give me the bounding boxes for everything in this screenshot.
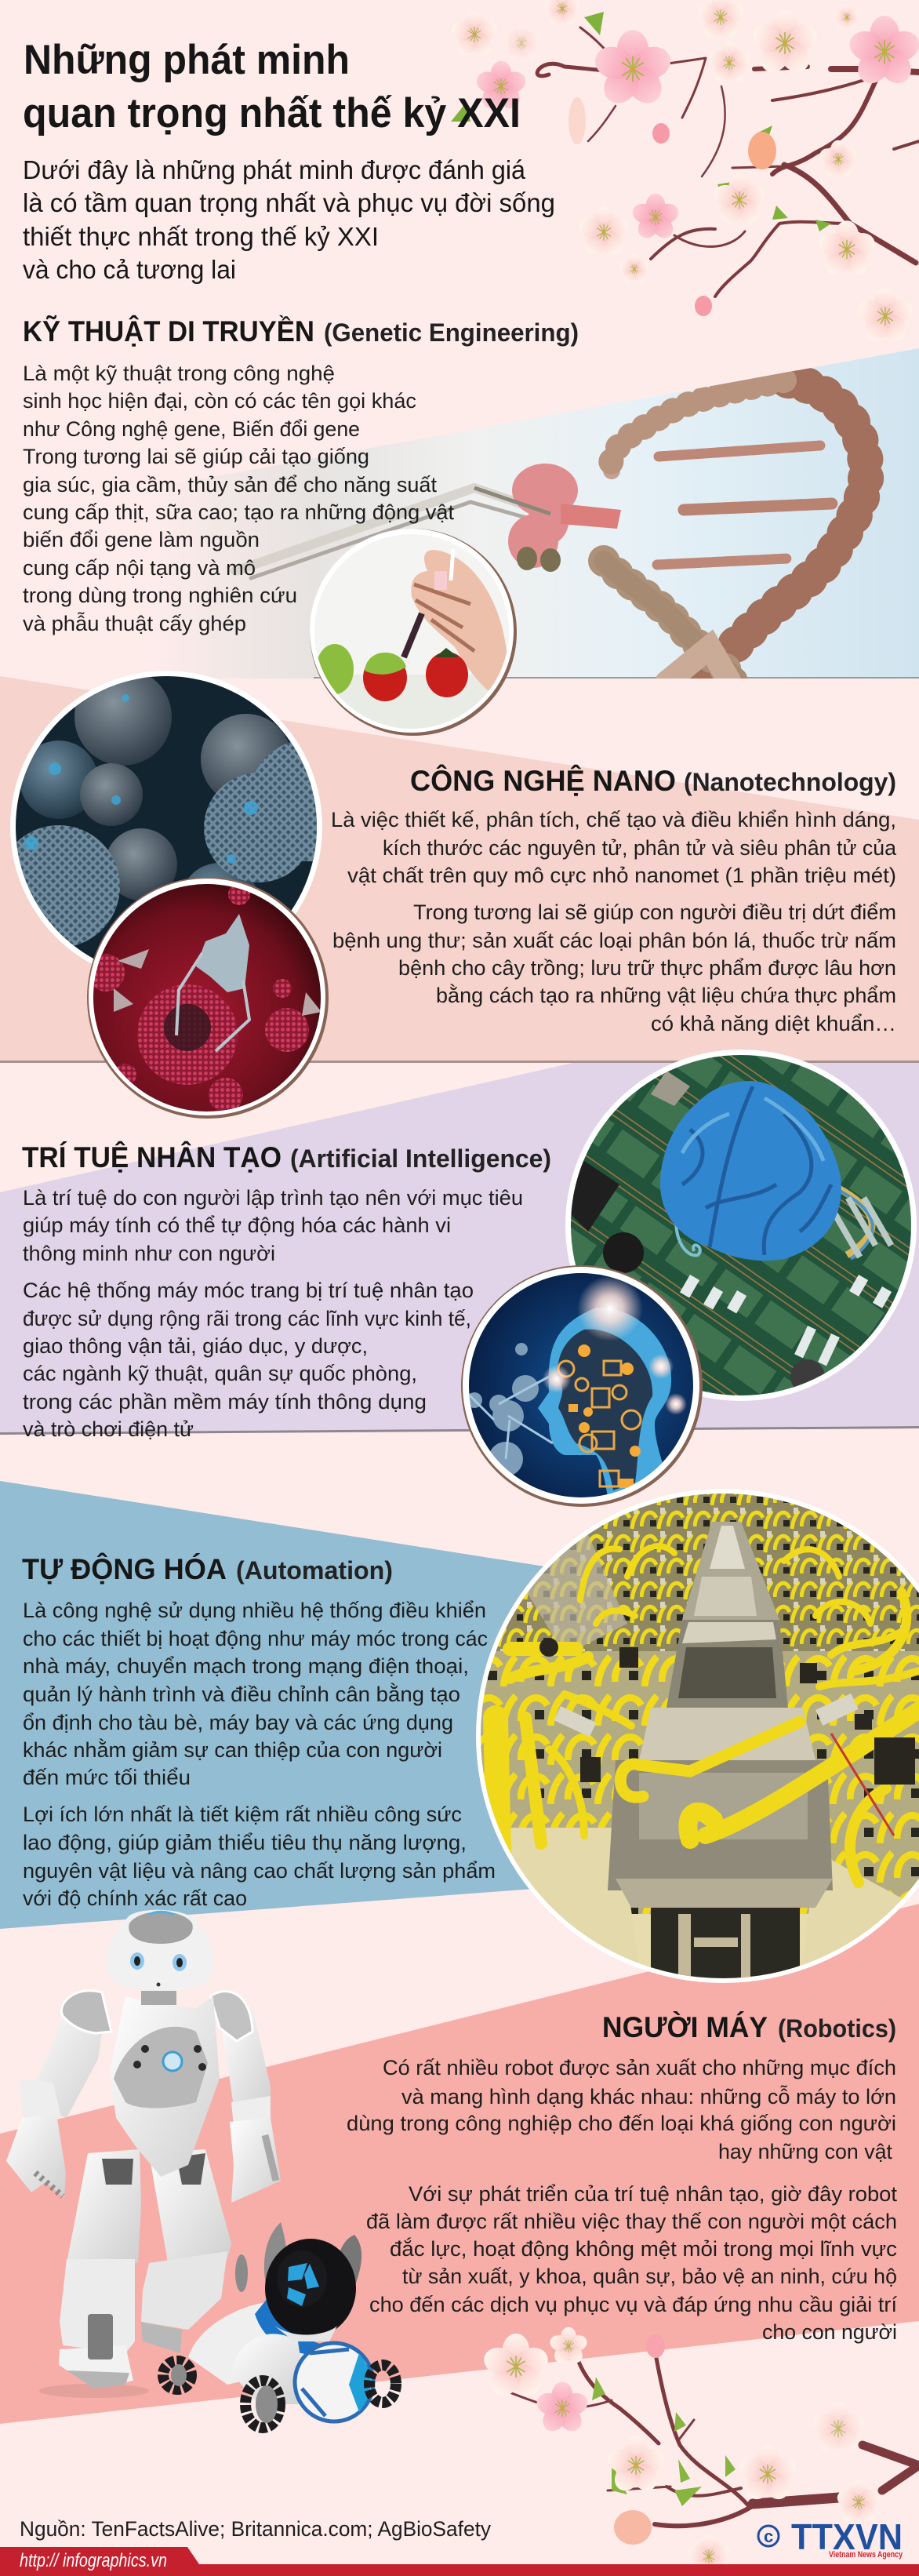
- body text: quản lý hành trình và điều chỉnh cân bằng tạo: [23, 1682, 460, 1706]
- photo: nanobot on virus: [86, 877, 329, 1122]
- photo: robotic car assembly line: [470, 1486, 919, 1992]
- panel: nanotechnology: [0, 667, 897, 1122]
- panel background: nanotechnology: [0, 676, 919, 1063]
- torso: [110, 1996, 220, 2177]
- panel background: robotics: [0, 1904, 919, 2424]
- body text: [23, 1599, 496, 1910]
- heading: (Genetic Engineering): [324, 318, 579, 347]
- body text: như Công nghệ gene, Biến đổi gene: [23, 417, 360, 441]
- body text: [347, 2056, 897, 2344]
- heading: NGƯỜI MÁY: [602, 2010, 768, 2043]
- photo: nano spheres: [10, 671, 322, 964]
- head: [107, 1910, 213, 1991]
- heading: TỰ ĐỘNG HÓA: [22, 1552, 227, 1585]
- heading: [22, 1552, 393, 1585]
- body text: vật chất trên quy mô cực nhỏ nanomet (1 phần triệu mét): [347, 864, 896, 887]
- footer bar with url: http:// infographics.vn: [20, 2550, 167, 2571]
- body text: đến mức tối thiểu: [23, 1766, 191, 1789]
- body text: kích thước các nguyên tử, phân tử và siêu phân tử của: [383, 836, 897, 860]
- body text: biến đổi gene làm nguồn: [23, 528, 260, 551]
- body text: và phẫu thuật cấy ghép: [23, 611, 246, 635]
- body text: Là trí tuệ do con người lập trình tạo nên với mục tiêu: [23, 1186, 523, 1210]
- panel background: artificial intelligence: [0, 1063, 919, 1435]
- body text: Là một kỹ thuật trong công nghệ: [23, 362, 335, 385]
- title: Những phát minh: [24, 37, 350, 83]
- body text: giao thông vận tải, giáo dục, y dược,: [23, 1334, 368, 1358]
- body text: thông minh như con người: [23, 1242, 275, 1265]
- photo: DNA helix with tweezers: [235, 380, 866, 682]
- body text: các ngành kỹ thuật, quân sự quốc phòng,: [23, 1362, 417, 1385]
- body text: bệnh cho cây trồng; lưu trữ thực phẩm được lâu hơn: [398, 956, 896, 980]
- heading: (Artificial Intelligence): [290, 1144, 551, 1173]
- heading: (Nanotechnology): [684, 768, 896, 796]
- heading: (Automation): [236, 1556, 393, 1585]
- body text: dùng trong công nghiệp cho đến loại khá giống con người: [347, 2112, 896, 2135]
- heading: [410, 764, 896, 797]
- photo: digital head: [461, 1265, 706, 1510]
- body text: [23, 1186, 523, 1441]
- body text: cho đến các dịch vụ phục vụ và đáp ứng nhu cầu giải trí: [369, 2293, 897, 2316]
- body text: cung cấp thịt, sữa cao; tạo ra những động vật: [23, 500, 455, 524]
- panel: automation: [22, 1486, 919, 1992]
- heading: CÔNG NGHỆ NANO: [410, 764, 676, 797]
- decoration: bottom blossom branch: [481, 2327, 919, 2576]
- panel: robotics: [6, 1910, 897, 2428]
- body text: với độ chính xác rất cao: [23, 1887, 247, 1910]
- title: [23, 37, 521, 136]
- photo: hand injecting tomatoes: [310, 529, 517, 737]
- body text: Là công nghệ sử dụng nhiều hệ thống điều khiển: [23, 1599, 486, 1622]
- logo: TTXVN: Vietnam News Agency: [829, 2550, 903, 2560]
- logo: TTXVN: TTXVN: [791, 2516, 903, 2557]
- body text: bệnh ung thư; sản xuất các loại phân bón lá, thuốc trừ nấm: [332, 929, 896, 952]
- body text: Với sự phát triển của trí tuệ nhân tạo, giờ đây robot: [409, 2182, 897, 2206]
- body text: sinh học hiện đại, còn có các tên gọi khác: [23, 389, 416, 413]
- body text: nhà máy, chuyển mạch trong mạng điện thoại,: [23, 1654, 469, 1678]
- panel background: genetic photo band: [202, 348, 919, 679]
- body text: khác nhằm giảm sự can thiệp của con người: [23, 1737, 442, 1762]
- body text: được sử dụng rộng rãi trong các lĩnh vực kinh tế,: [23, 1307, 471, 1330]
- body text: nguyên vật liệu và nâng cao chất lượng sản phẩm: [23, 1859, 496, 1883]
- body text: lao động, giúp giảm thiểu tiêu thụ năng lượng,: [23, 1831, 467, 1854]
- body text: [331, 808, 897, 1035]
- body text: cho các thiết bị hoạt động như máy móc trong các: [23, 1627, 488, 1650]
- body text: giúp máy tính có thể tự động hóa các hành vi: [23, 1213, 451, 1237]
- body text: Các hệ thống máy móc trang bị trí tuệ nhân tạo: [23, 1279, 474, 1302]
- panel: artificial intelligence: [22, 1050, 919, 1510]
- heading: [22, 1141, 551, 1173]
- left arm: [27, 2004, 106, 2118]
- intro text: thiết thực nhất trong thế kỷ XXI: [23, 222, 379, 251]
- body text: [23, 362, 455, 635]
- decoration: top blossom branch: [449, 0, 919, 345]
- heading: KỸ THUẬT DI TRUYỀN: [23, 315, 314, 347]
- body text: hay những con vật: [718, 2140, 892, 2163]
- body text: trong các phần mềm máy tính thông dụng: [23, 1390, 427, 1414]
- intro text: là có tầm quan trọng nhất và phục vụ đời sống: [23, 188, 555, 217]
- panel: genetic engineering: [23, 315, 866, 737]
- body text: và trò chơi điện tử: [23, 1417, 194, 1441]
- body text: cung cấp nội tạng và mô: [23, 556, 256, 580]
- body text: Trong tương lai sẽ giúp cải tạo giống: [23, 445, 369, 468]
- body text: đã làm được rất nhiều việc thay thế con người một cách: [366, 2210, 897, 2233]
- body text: bằng cách tạo ra những vật liệu chứa thực phẩm: [436, 983, 896, 1007]
- intro text: Dưới đây là những phát minh được đánh giá: [23, 155, 526, 184]
- source line: Nguồn: TenFactsAlive; Britannica.com; AgBioSafety: [20, 2517, 491, 2541]
- legs: [67, 2149, 141, 2263]
- heading: (Robotics): [778, 2014, 896, 2043]
- body text: và mang hình dạng khác nhau: những cỗ máy to lớn: [401, 2084, 896, 2108]
- body text: cho con người: [762, 2320, 897, 2344]
- body text: đắc lực, hoạt động không mệt mỏi trong mọi lĩnh vực: [390, 2236, 897, 2261]
- right arm: [218, 2008, 271, 2118]
- body text: Lợi ích lớn nhất là tiết kiệm rất nhiều công sức: [23, 1803, 462, 1826]
- intro text: và cho cả tương lai: [23, 255, 236, 284]
- body text: gia súc, gia cầm, thủy sản để cho năng suất: [23, 473, 437, 497]
- photo: brain on circuit board: [565, 1050, 919, 1404]
- title: quan trọng nhất thế kỷ XXI: [23, 90, 521, 136]
- body text: trong dùng trong nghiên cứu: [23, 584, 297, 607]
- photo: robot dog: [163, 2222, 396, 2428]
- intro text: [23, 155, 555, 284]
- body text: có khả năng diệt khuẩn…: [651, 1012, 896, 1035]
- heading: [602, 2010, 896, 2043]
- heading: TRÍ TUỆ NHÂN TẠO: [22, 1141, 282, 1173]
- body text: Là việc thiết kế, phân tích, chế tạo và điều khiển hình dáng,: [331, 808, 896, 831]
- logo: TTXVN: c: [764, 2527, 773, 2546]
- footer bar with url: [0, 2547, 919, 2576]
- heading: [23, 315, 579, 347]
- body text: từ sản xuất, y khoa, quân sự, bảo vệ an ninh, cứu hộ: [402, 2265, 897, 2288]
- panel background: automation: [0, 1481, 565, 1929]
- body text: Có rất nhiều robot được sản xuất cho những mục đích: [383, 2056, 896, 2079]
- body text: ổn định cho tàu bè, máy bay và các ứng dụng: [23, 1711, 453, 1734]
- wheels: [163, 2361, 396, 2428]
- body text: Trong tương lai sẽ giúp con người điều trị dứt điểm: [413, 901, 896, 924]
- photo: humanoid robot: [6, 1910, 281, 2398]
